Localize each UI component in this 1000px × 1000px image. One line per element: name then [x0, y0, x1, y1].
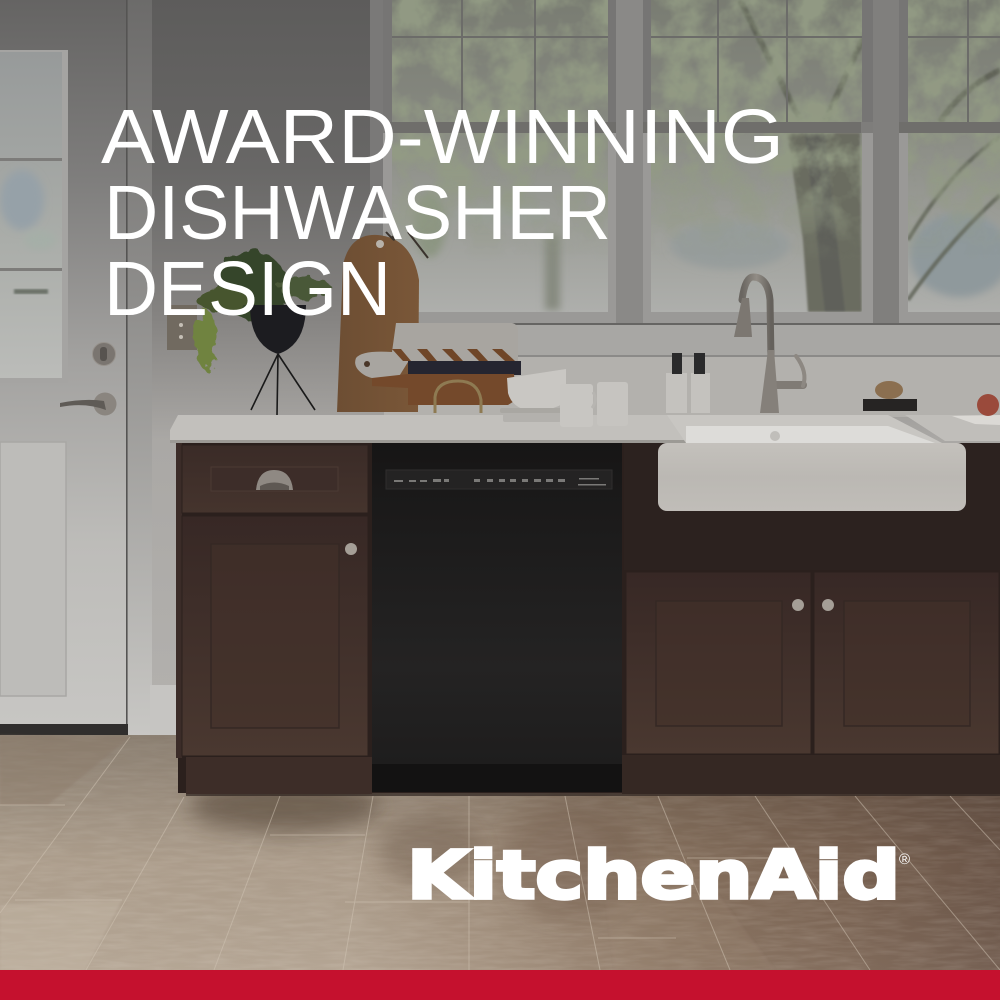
cabinetry	[176, 443, 1000, 794]
KitchenAid logo: ®	[899, 851, 910, 868]
outdoor tree and foliage	[370, 0, 1000, 320]
wall outlet	[167, 305, 197, 350]
door threshold	[0, 724, 128, 735]
base under sink	[624, 443, 1000, 570]
title: AWARD-WINNING	[101, 94, 784, 180]
window muntins	[392, 0, 1000, 122]
low wooden board	[372, 374, 516, 405]
potted plant	[196, 251, 331, 415]
dishes	[500, 369, 628, 427]
dark shadow under cabinets	[186, 793, 1000, 796]
drawer	[182, 445, 368, 513]
red footer band	[0, 970, 1000, 1000]
peach on plate	[952, 394, 1000, 425]
window panes: left	[392, 0, 608, 312]
window panes: centre	[651, 0, 862, 312]
drawer cup pull	[256, 470, 293, 490]
tall wood board	[337, 235, 419, 412]
knob	[792, 599, 804, 611]
door glass	[0, 50, 68, 383]
floor planks	[0, 735, 775, 970]
window panes: right	[908, 0, 1000, 312]
back wall	[0, 0, 1000, 760]
knob	[822, 599, 834, 611]
plank gaps	[0, 737, 1000, 970]
countertop	[170, 415, 1000, 443]
right toe kick	[622, 755, 1000, 794]
faucet	[734, 277, 804, 413]
left door	[182, 516, 368, 756]
windows	[370, 0, 1000, 358]
title: DESIGN	[104, 246, 391, 332]
chevron strips	[392, 349, 515, 361]
door slab	[0, 0, 127, 724]
window sill	[372, 325, 1000, 355]
backsplash	[384, 357, 1000, 417]
KitchenAid logo: KitchenAid	[407, 837, 900, 914]
control panel	[386, 470, 612, 489]
window frames and sashes	[383, 133, 1000, 323]
title: DISHWASHER	[104, 170, 611, 256]
right cabinet door left	[626, 572, 811, 754]
door trim	[127, 0, 152, 736]
title	[101, 94, 784, 332]
door knob	[345, 543, 357, 555]
door and trim	[0, 0, 180, 736]
left toe kick	[186, 757, 372, 794]
floor	[0, 735, 1000, 970]
brass handle	[435, 381, 481, 413]
dishwasher	[372, 443, 622, 792]
right cabinet door right	[814, 572, 999, 754]
marble board	[355, 323, 518, 380]
door handle	[60, 342, 116, 416]
brush on tray	[863, 381, 917, 411]
farmhouse sink	[658, 415, 966, 511]
dark board	[408, 361, 521, 375]
soap dispensers	[666, 353, 710, 413]
cutting boards	[337, 232, 521, 413]
cast shadow on floor	[190, 780, 380, 832]
door lower panel	[0, 442, 66, 696]
